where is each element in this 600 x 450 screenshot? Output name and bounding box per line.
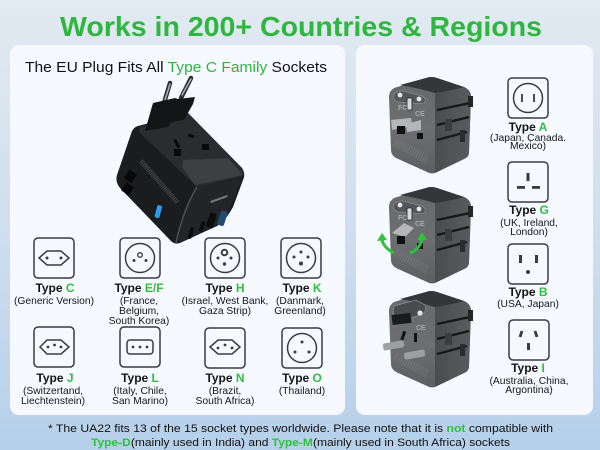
socket: Type C: Type C bbox=[35, 281, 75, 295]
socket: Type H: (Israel, West Bank, bbox=[182, 296, 268, 307]
socket: Type N: (Brazit, bbox=[209, 386, 241, 397]
socket: Type A: Mexico) bbox=[510, 141, 546, 152]
socket: Type L: (Italy, Chile, bbox=[113, 386, 167, 397]
socket: Type G: (UK, Ireland, bbox=[500, 218, 558, 229]
panel: EU plug socket types bbox=[10, 45, 345, 415]
adapter: rotating pins bbox=[377, 187, 473, 284]
socket: Type B: Type B bbox=[508, 285, 548, 299]
socket: Type E/F: Belgium, bbox=[119, 306, 159, 317]
socket: Type G: Type G bbox=[509, 203, 549, 217]
title: Works in 200+ Countries & Regions bbox=[60, 11, 542, 42]
socket: Type J: Liechtenstein) bbox=[21, 396, 85, 407]
socket: Type H bbox=[182, 238, 268, 317]
socket: Type A bbox=[490, 78, 566, 152]
rotation arrows bbox=[377, 232, 427, 253]
socket: Type O bbox=[279, 328, 325, 397]
socket: Type L bbox=[112, 327, 168, 407]
socket: Type J: (Switzertand, bbox=[23, 386, 83, 397]
socket: Type C: (Generic Version) bbox=[14, 296, 94, 307]
footnote bbox=[48, 423, 553, 449]
socket: Type G: London) bbox=[510, 227, 548, 238]
adapter: US pins extended: CE bbox=[415, 111, 425, 118]
socket: Type E/F: South Korea) bbox=[109, 316, 169, 327]
adapter: UK/AU pins extended: CE bbox=[416, 325, 426, 332]
socket: Type A: Type A bbox=[509, 120, 548, 134]
socket: Type K: Type K bbox=[282, 281, 322, 295]
socket: Type A: (Japan, Canada. bbox=[490, 133, 566, 144]
socket: Type H: Gaza Strip) bbox=[199, 306, 251, 317]
socket: Type O: (Thailand) bbox=[279, 386, 325, 397]
adapter: rotating pins: CE bbox=[415, 221, 425, 228]
footnote: Type-D(mainly used in India) and Type-M (mainly used in South Africa) sockets bbox=[91, 437, 510, 449]
socket: Type K: Greenland) bbox=[274, 306, 326, 317]
socket: Type N: Type N bbox=[205, 371, 245, 385]
socket: Type C bbox=[14, 238, 94, 307]
socket: Type K: (Danmark, bbox=[276, 296, 324, 307]
panel: other plugs bbox=[356, 45, 593, 415]
panel heading: The EU Plug Fits All Type C Family Sockets bbox=[25, 59, 327, 76]
socket: Type I bbox=[490, 320, 568, 396]
socket: Type N: South Africa) bbox=[196, 396, 254, 407]
socket: Type J bbox=[21, 327, 85, 407]
adapter: UK/AU pins extended bbox=[383, 291, 473, 388]
socket: Type E/F bbox=[109, 238, 169, 327]
socket: Type H: Type H bbox=[205, 281, 245, 295]
socket: Type J: Type J bbox=[36, 371, 74, 385]
socket: Type L: Type L bbox=[121, 371, 159, 385]
product: black adapter with EU plug bbox=[116, 78, 244, 244]
socket: Type B bbox=[497, 244, 559, 310]
socket: Type I: Type I bbox=[511, 361, 545, 375]
socket: Type B: (USA, Japan) bbox=[497, 299, 559, 310]
socket: Type N bbox=[196, 328, 254, 407]
adapter: rotating pins: FC bbox=[398, 215, 407, 222]
socket: Type I: (Australia, China, bbox=[490, 376, 568, 387]
adapter: US pins extended: FC bbox=[398, 105, 407, 112]
socket: Type I: Argontina) bbox=[505, 385, 553, 396]
socket: Type K bbox=[274, 238, 326, 317]
footnote: * The UA22 fits 13 of the 15 socket types worldwide. Please note that it is not compatible with bbox=[48, 423, 553, 435]
socket: Type E/F: Type E/F bbox=[114, 281, 164, 295]
socket: Type L: San Marino) bbox=[112, 396, 168, 407]
socket: Type G bbox=[500, 162, 558, 238]
socket: Type O: Type O bbox=[282, 371, 322, 385]
adapter: US pins extended bbox=[389, 77, 473, 174]
socket: Type E/F: (France, bbox=[120, 296, 158, 307]
